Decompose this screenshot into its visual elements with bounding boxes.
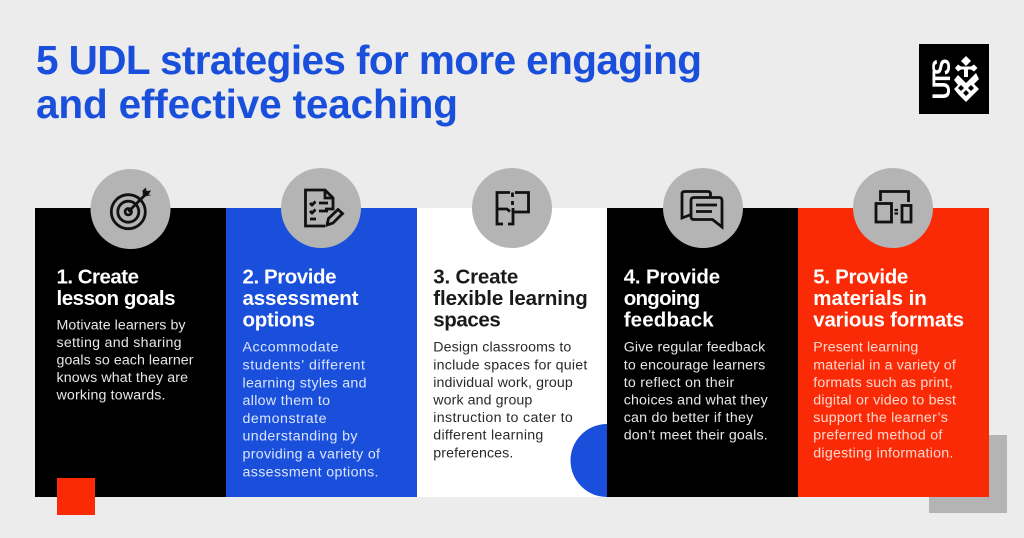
heading 5: 5. Provide	[813, 266, 908, 288]
heading 3	[433, 266, 588, 332]
heading 1	[56, 266, 176, 310]
body text 4: to encourage learners	[624, 357, 765, 373]
logo emblem	[954, 56, 979, 102]
icon circle 1	[90, 169, 170, 249]
body text 2: learning styles and	[242, 375, 366, 391]
body text 1	[56, 318, 194, 404]
body text 1: setting and sharing	[56, 335, 182, 351]
body text 2	[242, 340, 380, 480]
body text 5: material in a variety of	[813, 357, 956, 373]
heading 4	[624, 266, 720, 332]
body text 1: working towards.	[56, 388, 166, 404]
UTS logo	[919, 44, 989, 114]
body text 2: students’ different	[242, 358, 365, 374]
body text 4: don’t meet their goals.	[624, 428, 768, 444]
body text 5: preferred method of	[813, 428, 942, 444]
heading 4: feedback	[624, 309, 714, 332]
icon circle 2	[281, 168, 361, 248]
heading 5	[813, 266, 964, 332]
body text 5: formats such as print,	[813, 375, 953, 391]
body text 2: assessment options.	[242, 464, 378, 480]
heading 1: 1. Create	[56, 266, 139, 288]
body text 2: Accommodate	[242, 340, 339, 356]
body text 5: digital or video to best	[813, 392, 956, 408]
heading 5: materials in	[813, 287, 927, 310]
body text 5: support the learner’s	[813, 410, 948, 426]
body text 1: Motivate learners by	[56, 318, 186, 334]
title: and effective teaching	[36, 81, 458, 127]
UTS logo: UTS	[928, 58, 956, 100]
body text 3: include spaces for quiet	[433, 357, 587, 373]
body text 3	[432, 340, 587, 461]
heading 4: ongoing	[624, 287, 700, 310]
heading 2	[242, 266, 359, 332]
icon: target with arrow	[111, 188, 152, 229]
panel 4: provide ongoing feedback	[607, 168, 798, 497]
body text 3: individual work, group	[433, 375, 573, 391]
panel 2: provide assessment options	[226, 168, 417, 497]
icon: checklist document with pencil	[306, 190, 342, 226]
body text 5	[813, 340, 956, 461]
body text 1: knows what they are	[56, 370, 188, 386]
heading 1: lesson goals	[56, 287, 176, 310]
icon: floor plan	[497, 192, 528, 224]
panel 3: create flexible learning spaces	[417, 168, 607, 497]
body text 1: goals so each learner	[56, 352, 194, 368]
body text 3: different learning	[433, 428, 543, 444]
body text 4: to reflect on their	[624, 375, 734, 391]
body text 3: work and group	[432, 392, 532, 408]
body text 3: instruction to cater to	[433, 410, 573, 426]
body text 4	[624, 340, 769, 444]
body text 3: Design classrooms to	[433, 340, 571, 356]
body text 2: allow them to	[242, 393, 330, 409]
body text 4: choices and what they	[624, 392, 769, 408]
icon circle 3	[472, 168, 552, 248]
body text 5: Present learning	[813, 340, 918, 356]
body text 3: preferences.	[433, 445, 513, 461]
body text 2: demonstrate	[242, 411, 327, 427]
panel 5: provide materials in various formats	[798, 168, 989, 497]
body text 2: providing a variety of	[242, 446, 380, 462]
decorative blue semicircle	[570, 424, 607, 497]
body text 4: can do better if they	[624, 410, 754, 426]
panel 1: create lesson goals	[35, 169, 226, 497]
decorative red square	[57, 478, 95, 515]
icon circle 4	[663, 168, 743, 248]
heading 2: options	[242, 309, 315, 332]
body text 4: Give regular feedback	[624, 340, 766, 356]
heading 5: various formats	[813, 309, 964, 332]
heading 2: 2. Provide	[242, 266, 336, 288]
heading 2: assessment	[242, 287, 359, 310]
icon: responsive devices	[876, 192, 911, 222]
title	[36, 37, 702, 127]
heading 3: flexible learning	[433, 287, 588, 310]
heading 4: 4. Provide	[624, 266, 720, 288]
icon: speech bubbles	[682, 192, 722, 227]
body text 2: understanding by	[242, 429, 358, 445]
heading 3: 3. Create	[433, 266, 518, 288]
icon circle 5	[853, 168, 933, 248]
body text 5: digesting information.	[813, 445, 953, 461]
title: 5 UDL strategies for more engaging	[36, 37, 702, 83]
decorative grey square	[929, 435, 1007, 513]
heading 3: spaces	[433, 309, 501, 332]
